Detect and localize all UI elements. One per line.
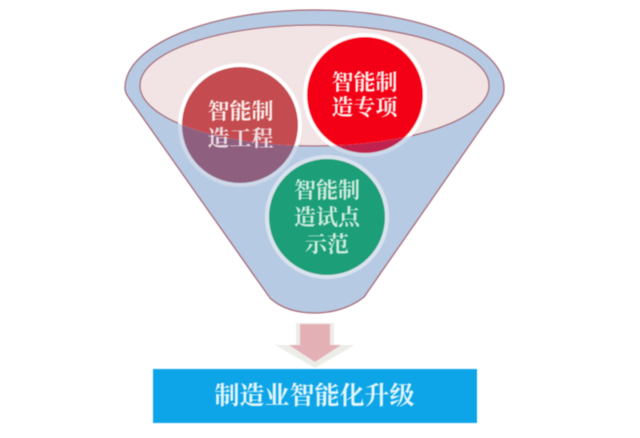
label: 智能制造专项: 智能制 (331, 70, 398, 95)
funnel opening: ellipse (140, 25, 489, 146)
funnel body (125, 10, 504, 313)
output box (153, 369, 477, 423)
label: 智能制造工程: 造工程 (207, 126, 274, 151)
label: 智能制造工程 (207, 99, 274, 151)
label: 智能制造试点示范 (294, 178, 362, 257)
label: 智能制造专项 (331, 70, 398, 120)
funnel diagram (125, 10, 504, 423)
circle: 智能制造试点示范 (265, 155, 389, 279)
label: 智能制造试点示范: 示范 (305, 232, 349, 257)
arrow (275, 323, 355, 368)
circle: 智能制造工程 (178, 63, 302, 187)
label: 智能制造试点示范: 造试点 (294, 205, 362, 230)
circle: 智能制造专项 (303, 33, 427, 157)
label: 智能制造试点示范: 智能制 (294, 178, 360, 203)
label: 智能制造专项: 造专项 (331, 95, 398, 120)
label: 制造业智能化升级: 制造业智能化升级 (214, 382, 415, 410)
label: 智能制造工程: 智能制 (207, 99, 274, 124)
